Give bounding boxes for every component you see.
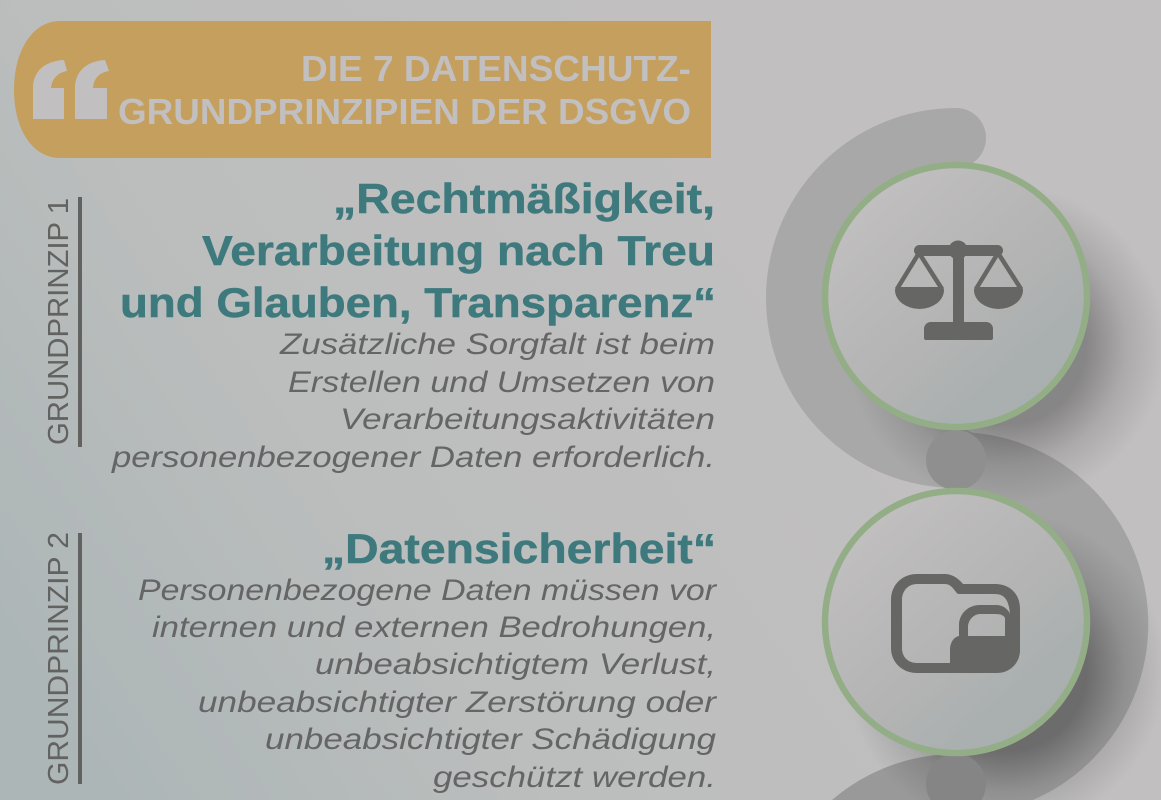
text block: Grundprinzip 1: Verarbeitungsaktivitäten: [340, 403, 715, 436]
heading: Grundprinzip 2: „Datensicherheit“: [322, 525, 716, 572]
heading: Grundprinzip 1: und Glauben, Transparenz“: [120, 279, 716, 326]
banner heading: [118, 48, 691, 132]
shadow: second disc: [846, 511, 1161, 800]
text block: Grundprinzip 1: [111, 328, 715, 474]
text block: Grundprinzip 2: [138, 574, 717, 794]
banner heading: DIE 7 DATENSCHUTZ-: [301, 48, 691, 89]
label: Grundprinzip 1: GRUNDPRINZIP 1: [43, 198, 75, 445]
shadow: first disc: [846, 185, 1161, 505]
ribbon: curved connector: [796, 138, 1161, 800]
icon: folder with padlock: [891, 574, 1020, 673]
text block: Grundprinzip 1: Erstellen und Umsetzen von: [288, 366, 715, 399]
text block: Grundprinzip 2: Personenbezogene Daten müssen vor: [138, 574, 717, 607]
banner heading: GRUNDPRINZIPIEN DER DSGVO: [118, 91, 691, 132]
text block: Grundprinzip 2: unbeabsichtigtem Verlust,: [315, 648, 716, 681]
label: Grundprinzip 2: GRUNDPRINZIP 2: [43, 532, 75, 785]
title banner: [14, 21, 711, 158]
heading: Grundprinzip 1: [120, 175, 716, 326]
icon: scales: [895, 240, 1023, 340]
text block: Grundprinzip 2: geschützt werden.: [433, 761, 716, 794]
text block: Grundprinzip 2: unbeabsichtigter Schädigung: [265, 723, 716, 756]
panel: folder disc: [825, 491, 1087, 753]
heading: Grundprinzip 1: „Rechtmäßigkeit,: [333, 175, 715, 222]
text block: Grundprinzip 2: internen und externen Bedrohungen,: [152, 611, 716, 644]
panel: scales disc: [825, 165, 1087, 427]
icon: quotation marks: [33, 60, 109, 119]
heading: Grundprinzip 1: Verarbeitung nach Treu: [202, 227, 715, 274]
text block: Grundprinzip 2: unbeabsichtigter Zerstörung oder: [198, 686, 717, 719]
text block: Grundprinzip 1: personenbezogener Daten erforderlich.: [111, 441, 715, 474]
text block: Grundprinzip 1: Zusätzliche Sorgfalt ist beim: [279, 328, 715, 361]
